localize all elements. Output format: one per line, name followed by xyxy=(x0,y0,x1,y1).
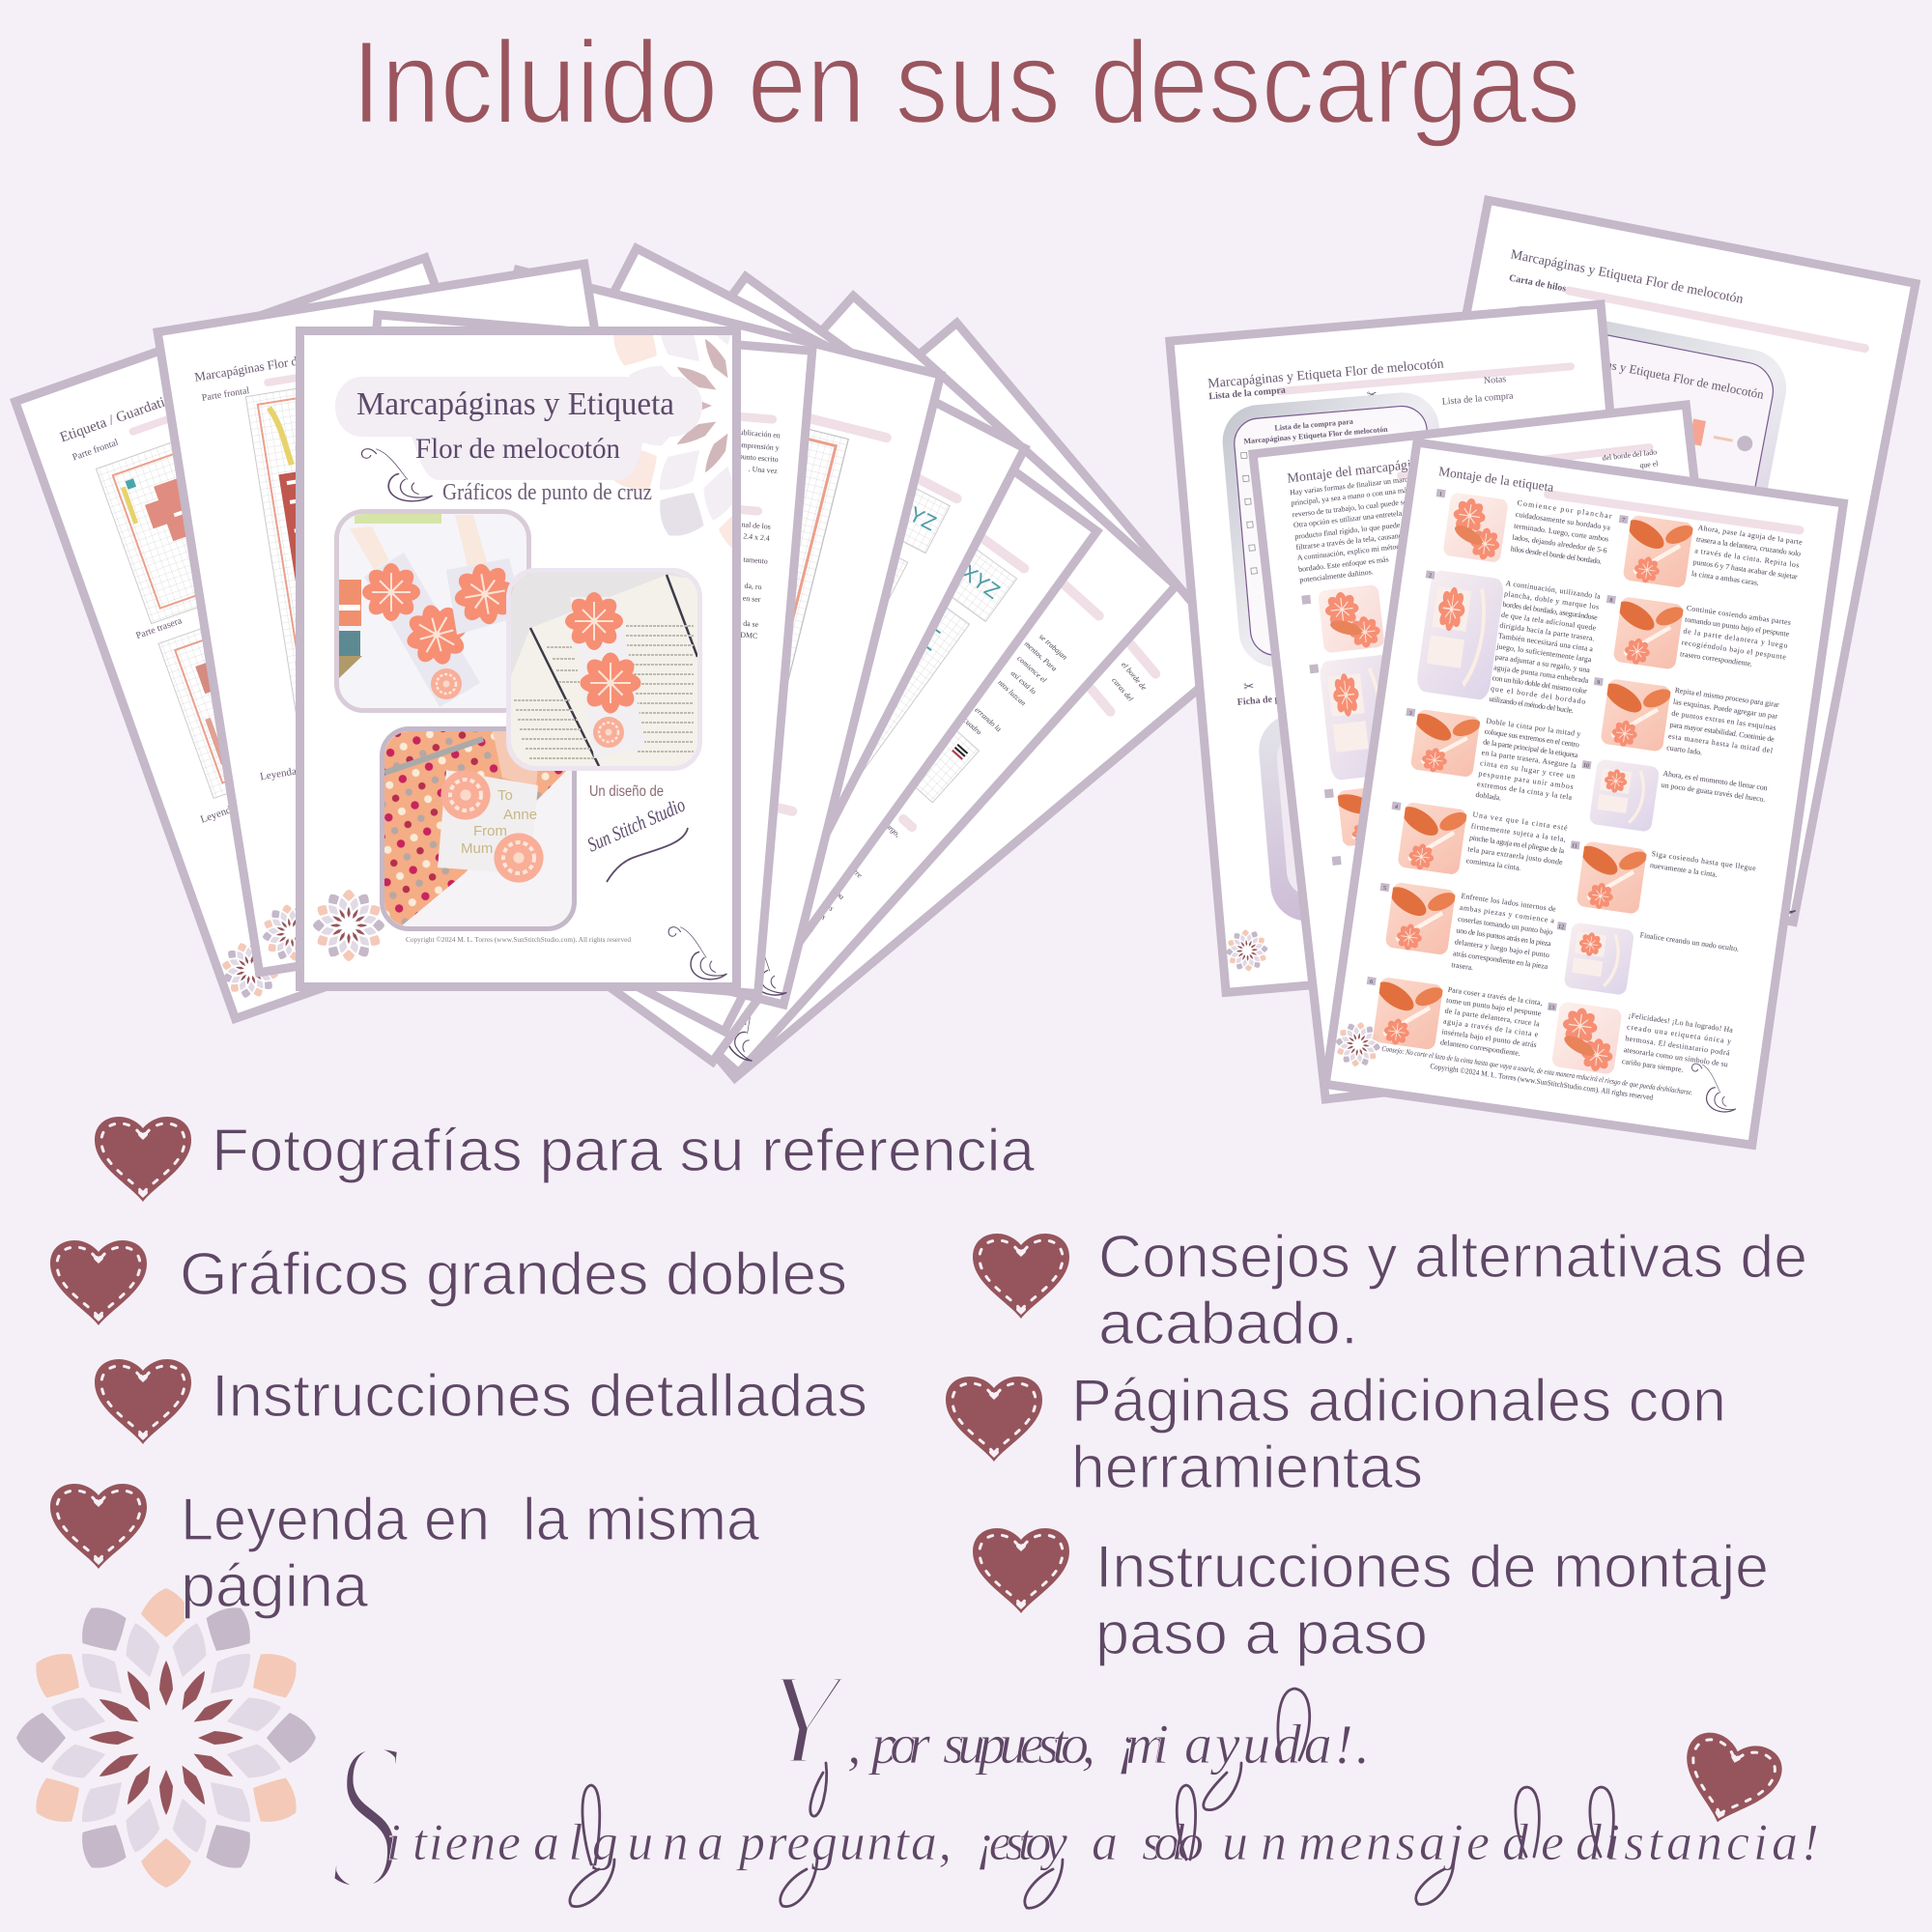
left column instructions: firmemente sujeta a la tela, xyxy=(1470,822,1567,843)
left column instructions: uno de los puntos atrás en la pieza xyxy=(1456,925,1552,948)
page: bookmark assembly: A continuación, explico mi método xyxy=(1296,541,1405,562)
step number tags: 4 xyxy=(1394,805,1398,810)
left column instructions: terminado. Luego, corte ambos xyxy=(1514,522,1609,544)
right page group: assembly pages xyxy=(1170,200,1916,1145)
page: bookmark assembly: Montaje del marcapáginas xyxy=(1287,456,1430,487)
page 3: r de xyxy=(723,689,735,698)
step number tags: 10 xyxy=(1582,763,1589,770)
page 1: etiqueta chart: Leyenda xyxy=(199,803,238,826)
page 7: ntos luzcan xyxy=(996,678,1028,707)
page 7: se trabajan xyxy=(1037,632,1069,662)
script line 2: a xyxy=(1092,1813,1118,1871)
page 2: marcapáginas chart: Parte frontal xyxy=(201,385,250,404)
cover title plaque xyxy=(335,377,702,480)
page: shopping list: Lista de la compra para xyxy=(1274,417,1353,433)
cover subtitle: Flor de melocotón xyxy=(415,433,620,465)
script line 2: de xyxy=(1502,1813,1564,1871)
step number tags: 7 xyxy=(1622,518,1625,524)
page: bookmark assembly xyxy=(1253,405,1759,1099)
benefit: instructions: Instrucciones detalladas xyxy=(212,1363,867,1430)
photo 1: bookmark and tag xyxy=(336,512,529,711)
page 7: os xyxy=(825,902,836,913)
right column instructions: trasera a la delantera, cruzando solo xyxy=(1696,534,1802,558)
left column instructions: juego, lo suficientemente larga xyxy=(1495,641,1593,664)
left column instructions: que el borde del bordado xyxy=(1491,684,1586,706)
script line 1: Y xyxy=(763,1647,853,1792)
right column instructions: Ahora, es el momento de llenar con xyxy=(1662,769,1768,792)
step number tags: 3 xyxy=(1408,711,1412,717)
script line 2: solo xyxy=(1142,1813,1204,1871)
left column instructions: hilos desde el borde del bordado. xyxy=(1510,544,1603,566)
script line 2: tiene xyxy=(412,1813,521,1871)
page: bookmark assembly: que el xyxy=(1639,459,1660,469)
step number tags: 12 xyxy=(1558,924,1564,931)
left column instructions: dirigida hacia la parte trasera. xyxy=(1499,621,1595,642)
left column instructions: cinta en su lugar y cree un xyxy=(1480,758,1576,781)
page: shopping list: ✂ xyxy=(1366,387,1378,402)
page 7 xyxy=(415,296,1178,1074)
step number tags: 11 xyxy=(1572,843,1577,850)
benefit: photos: Fotografías para su referencia xyxy=(212,1118,1036,1184)
cover tagline: Gráficos de punto de cruz xyxy=(442,480,652,505)
left column instructions: aguja de punta roma enhebrada xyxy=(1493,663,1589,685)
left column instructions: para adjuntar a su regalo, y una xyxy=(1494,652,1591,674)
benefit: tips xyxy=(1098,1224,1807,1357)
page: bookmark assembly: Hay varias formas de finalizar un marcapáginas xyxy=(1290,471,1435,497)
left column instructions: aguja a través de la cinta e xyxy=(1443,1016,1539,1038)
page: bookmark assembly: principal, ya sea a mano o con una máquina xyxy=(1291,484,1425,507)
page 7: n xyxy=(807,926,815,935)
script line 2: pregunta, xyxy=(735,1813,952,1871)
step number tags: 2 xyxy=(1429,573,1432,580)
photo 3: pillow on wrapping paper: To xyxy=(497,787,513,804)
right column instructions: hermosa. El destinatario podrá xyxy=(1625,1034,1731,1058)
step number tags xyxy=(1367,489,1629,1012)
signature: Sun Stitch Studio xyxy=(583,793,689,857)
right column instructions: cariño para siempre. xyxy=(1622,1057,1684,1074)
page 3: final de los xyxy=(737,520,771,531)
page 3: da, ro xyxy=(744,582,762,591)
page: bookmark assembly: reverso de tu trabajo, lo cual puede ser visible xyxy=(1292,495,1433,519)
page 3 xyxy=(324,315,812,994)
page fan: chart and instruction pages xyxy=(15,248,1237,1078)
page 7: mentos. Para xyxy=(1023,639,1059,673)
page: bookmark assembly: producto final rígido, lo que puede afectar xyxy=(1294,518,1423,541)
page 3: en ser xyxy=(743,594,761,604)
heart bullet xyxy=(50,1484,147,1569)
heart bullet xyxy=(946,1377,1042,1462)
page: shopping list: ✂ xyxy=(1243,678,1255,694)
page 3: n xyxy=(724,762,728,771)
left column instructions: Para coser a través de la cinta, xyxy=(1447,985,1543,1008)
right column instructions: de la parte delantera y luego xyxy=(1683,626,1788,650)
page 5: XYZ xyxy=(893,496,940,535)
left column instructions: cuidadosamente su bordado ya xyxy=(1515,510,1611,532)
benefit: assembly: Instrucciones de montaje xyxy=(1095,1534,1769,1601)
script line 2: i xyxy=(386,1813,401,1871)
flower emblem xyxy=(16,1588,316,1888)
left column instructions: delantero correspondiente. xyxy=(1439,1037,1520,1058)
right column instructions: cuarto lado. xyxy=(1666,743,1703,756)
benefit: assembly xyxy=(1095,1534,1769,1667)
cover mini flower xyxy=(313,890,384,961)
cover page xyxy=(296,327,741,991)
right benefits list xyxy=(946,1224,1807,1667)
benefit: extra pages xyxy=(1071,1368,1726,1501)
page footer note: Consejo: No corte el lazo de la cinta hasta que vaya a usarla, de esta manera reducirá el riesgo de que pueda deshilacharse. xyxy=(1381,1044,1693,1097)
page 1: etiqueta chart: Parte frontal xyxy=(71,438,120,463)
benefit: legend xyxy=(181,1487,760,1620)
right column instructions: Repita el mismo proceso para girar xyxy=(1674,686,1780,709)
copyright: Copyright ©2024 M. L. Torres (www.SunStitchStudio.com). All rights reserved xyxy=(406,935,631,944)
left column instructions: coserlas tomando un punto bajo xyxy=(1458,915,1553,936)
photo 3: pillow on wrapping paper: From xyxy=(473,823,507,839)
page: shopping list: Marcapáginas y Etiqueta Flor de melocotón xyxy=(1243,425,1388,445)
left column instructions: tome un punto bajo el pespunte xyxy=(1446,996,1542,1018)
heart bullet xyxy=(95,1359,191,1444)
left column instructions: con un hilo doble del mismo color xyxy=(1492,673,1588,696)
left column instructions: utilizando el método del bucle. xyxy=(1489,695,1574,715)
left column instructions: plancha, doble y marque los xyxy=(1504,589,1600,611)
page: shopping list xyxy=(1170,304,1657,992)
closing message xyxy=(329,1647,1819,1932)
page: shopping list: Notas xyxy=(1484,374,1507,386)
right column instructions: esta manera hasta la mitad del xyxy=(1667,731,1774,755)
step number tags: 9 xyxy=(1597,680,1600,686)
script line 2: distancia! xyxy=(1576,1813,1819,1871)
script line 2: ¡estoy xyxy=(976,1813,1067,1871)
right column instructions: Ahora, pase la aguja de la parte xyxy=(1697,524,1804,547)
left column instructions: tela para extraerla justo donde xyxy=(1467,844,1564,867)
page: thread chart: Carta de hilos xyxy=(1508,272,1567,295)
right column instructions: creado una etiqueta única y xyxy=(1627,1022,1732,1046)
right column instructions: ¡Felicidades! ¡Lo ha logrado! Ha xyxy=(1628,1010,1734,1035)
page footer copyright: Copyright ©2024 M. L. Torres (www.SunStitchStudio.com). All rights reserved xyxy=(1430,1062,1654,1102)
page 1: etiqueta chart: Parte trasera xyxy=(134,615,184,641)
page 7: argo, xyxy=(884,822,902,838)
page: tag assembly steps xyxy=(1325,442,1843,1145)
right column instructions: recogiéndolo bajo el pespunte xyxy=(1681,638,1787,662)
benefit: legend: Leyenda en la misma xyxy=(181,1487,760,1553)
page 3: punto escrito xyxy=(739,452,779,464)
right column instructions: Continúe cosiendo ambas partes xyxy=(1686,604,1792,627)
step number tags: 6 xyxy=(1370,980,1373,985)
right column instructions: de puntos extras en las esquinas xyxy=(1671,709,1776,732)
step number tags: 5 xyxy=(1382,886,1386,892)
page 3: se xyxy=(725,715,733,724)
page 1: etiqueta chart: Etiqueta / Guardatijeras xyxy=(58,385,193,445)
page 7: s xyxy=(820,913,828,922)
faded cover flower xyxy=(614,335,732,549)
left column instructions: trasera. xyxy=(1451,960,1474,972)
heart bullet xyxy=(50,1240,147,1325)
page 5 xyxy=(336,248,1025,1032)
cover frame xyxy=(299,330,736,987)
heart bullet xyxy=(973,1234,1069,1319)
left column instructions: atrás correspondiente en la pieza xyxy=(1453,949,1548,971)
page 4 xyxy=(361,270,941,1005)
right column instructions: la cinta a ambas caras. xyxy=(1690,569,1760,587)
script line 1: ayuda!. xyxy=(1184,1713,1370,1776)
page 2: marcapáginas chart: Marcapáginas Flor de melocotón xyxy=(193,344,359,384)
heart bullet xyxy=(973,1528,1069,1613)
page 8 xyxy=(454,323,1237,1078)
heart accent xyxy=(1671,1727,1787,1835)
left benefits list xyxy=(50,1117,1036,1620)
photo 3: pillow on wrapping paper: Mum xyxy=(461,840,493,857)
right column instructions: a través de la cinta. Repita los xyxy=(1694,546,1800,570)
cover title: Marcapáginas y Etiqueta xyxy=(356,386,674,422)
left column instructions: Doble la cinta por la mitad y xyxy=(1486,717,1581,738)
step number tags: 8 xyxy=(1609,598,1613,604)
benefit: assembly: paso a paso xyxy=(1095,1601,1428,1667)
page: thread chart xyxy=(1366,200,1916,922)
right column instructions: un poco de guata través del hueco. xyxy=(1661,781,1766,804)
left column instructions: ambas piezas y comience a xyxy=(1459,903,1555,925)
page 6: UXYZ xyxy=(945,551,1005,604)
step number tags: 13 xyxy=(1548,1005,1555,1011)
page 6 xyxy=(361,276,1097,1062)
step number tags: 1 xyxy=(1439,492,1442,497)
script line 1: , xyxy=(847,1713,862,1776)
page 3: ro xyxy=(726,702,733,711)
page: bookmark assembly: potencialmente dañinos. xyxy=(1299,567,1374,584)
page 3: comprensión y xyxy=(734,440,780,452)
page 7: tre xyxy=(852,867,865,880)
left column instructions: de la parte delantera, cruce la xyxy=(1444,1007,1541,1029)
left column instructions: pespunte para unir ambos xyxy=(1478,769,1574,791)
left column instructions: pinche la aguja en el pliegue de la xyxy=(1469,833,1565,855)
benefit: extra pages: herramientas xyxy=(1071,1435,1423,1501)
page 1: etiqueta chart xyxy=(15,258,645,1018)
benefit: charts: Gráficos grandes dobles xyxy=(180,1241,847,1308)
page 3: . Una vez xyxy=(748,465,779,475)
decorative script swashes xyxy=(570,1689,1613,1908)
script line 1: ¡mi xyxy=(1117,1713,1169,1776)
right column instructions: nuevamente a la cinta. xyxy=(1649,861,1718,879)
page 7: con xyxy=(868,828,882,842)
step photos xyxy=(1365,487,1699,1077)
left column instructions: comienza la cinta. xyxy=(1465,856,1521,872)
left column instructions: coloque sus extremos en el centro xyxy=(1484,726,1580,749)
right column instructions: trasero correspondiente. xyxy=(1680,649,1753,668)
page 8: el borde de xyxy=(1120,660,1149,693)
page 3: DMC xyxy=(740,631,758,640)
page: shopping list: Lista de la compra xyxy=(1208,385,1286,402)
benefit: legend: página xyxy=(181,1553,369,1620)
page 7: comience el xyxy=(1015,654,1049,685)
page 3: de xyxy=(724,725,732,735)
page 7: pa xyxy=(834,889,846,901)
page 3: n xyxy=(723,775,727,784)
left column instructions: de que la tela adicional quede xyxy=(1500,611,1597,633)
left column instructions: A continuación, utilizando la xyxy=(1505,579,1602,601)
left column instructions: lados, dejando alrededor de 5-6 xyxy=(1512,533,1607,554)
cover flourish xyxy=(361,449,432,501)
page: shopping list: Ficha de proyecto xyxy=(1236,691,1311,708)
right column instructions xyxy=(1622,524,1804,1080)
page: bookmark assembly: bordado. Este enfoque es más xyxy=(1298,554,1389,574)
benefit: tips: acabado. xyxy=(1098,1291,1358,1357)
script line 2: mensaje xyxy=(1298,1813,1490,1871)
cover corner flourish xyxy=(668,927,726,980)
page mini flower xyxy=(1333,1019,1383,1070)
left column instructions: También necesitará una cinta a xyxy=(1497,631,1594,653)
page 3: Esta publicación en xyxy=(721,426,781,440)
left column instructions: extremos de la cinta y la tela xyxy=(1476,780,1573,802)
left column instructions: delantera y luego bajo el punto xyxy=(1454,937,1550,959)
left column instructions: Enfrente los lados internos de xyxy=(1461,892,1557,914)
right column instructions: Finalice creando un nudo oculto. xyxy=(1639,930,1740,953)
left column instructions: insértela bajo el punto de atrás xyxy=(1441,1027,1537,1049)
script line 1: por xyxy=(867,1713,930,1776)
page 7: la cuadro xyxy=(956,711,983,737)
right column instructions: puntos 6 y 7 hasta acabar de sujetar xyxy=(1692,557,1799,582)
page: shopping list: Marcapáginas y Etiqueta Flor de melocotón xyxy=(1208,357,1444,391)
script line 1: supuesto, xyxy=(943,1713,1095,1776)
page: thread chart: Marcapáginas y Etiqueta Flor de melocotón xyxy=(1509,247,1745,307)
page: bookmark assembly: del borde del lado xyxy=(1602,447,1658,463)
page 3: tamento xyxy=(743,555,768,566)
left column instructions: de la parte principal de la etiqueta xyxy=(1483,737,1578,759)
steps heading: Montaje de la etiqueta xyxy=(1437,464,1554,495)
page 2: marcapáginas chart: Leyenda xyxy=(259,766,298,782)
script line 2: S xyxy=(329,1694,403,1932)
signature xyxy=(583,793,689,882)
photo 2: bookmark on open book xyxy=(508,570,699,769)
left column instructions: bordes del bordado, asegurándose xyxy=(1502,600,1599,622)
page: thread chart: Marcapáginas y Etiqueta Flor de melocotón xyxy=(1547,346,1766,402)
left column instructions: en la parte trasera. Asegure la xyxy=(1481,748,1577,770)
script line 2: un xyxy=(1222,1813,1287,1871)
benefit: extra pages: Páginas adicionales con xyxy=(1071,1368,1726,1435)
page: bookmark assembly: filtrarse a través de la tela, causando xyxy=(1295,530,1406,552)
page 3: ra xyxy=(724,738,731,748)
page flourish xyxy=(1687,1063,1741,1114)
right column instructions: atesorarla como un símbolo de su xyxy=(1623,1045,1728,1068)
left column instructions: Una vez que la cinta esté xyxy=(1472,810,1569,833)
designer credit: Un diseño de xyxy=(589,783,664,800)
left column instructions xyxy=(1438,498,1613,1060)
page 2: marcapáginas chart xyxy=(157,264,686,973)
title: Incluido en sus descargas xyxy=(352,16,1580,148)
right column instructions: para mayor estabilidad. Continúe de xyxy=(1669,720,1776,744)
right column instructions: tomando un punto bajo el pespunte xyxy=(1685,615,1790,639)
page 7: errando la xyxy=(973,705,1003,733)
right column instructions: Siga cosiendo hasta que llegue xyxy=(1651,849,1757,872)
page: shopping list: Lista de la compra xyxy=(1441,391,1515,408)
left column instructions: Comience por planchar xyxy=(1517,498,1613,521)
left column instructions: doblada. xyxy=(1475,790,1502,803)
page: bookmark assembly: Otra opción es utilizar una entretela xyxy=(1293,508,1403,529)
page 7: así está lo xyxy=(1009,668,1038,696)
right column instructions: las esquinas. Puede agregar un par xyxy=(1673,697,1778,721)
script line 2: alguna xyxy=(533,1813,724,1871)
page 3: da se xyxy=(743,619,759,629)
heart bullet xyxy=(95,1117,191,1202)
benefit: tips: Consejos y alternativas de xyxy=(1098,1224,1807,1291)
photo 3: pillow on wrapping paper xyxy=(383,728,574,929)
page 3: 2.4 x 2.4 xyxy=(743,531,770,543)
steps bar xyxy=(1544,490,1804,535)
page 8: caras del xyxy=(1110,676,1135,703)
photo 3: pillow on wrapping paper: Anne xyxy=(503,807,537,823)
